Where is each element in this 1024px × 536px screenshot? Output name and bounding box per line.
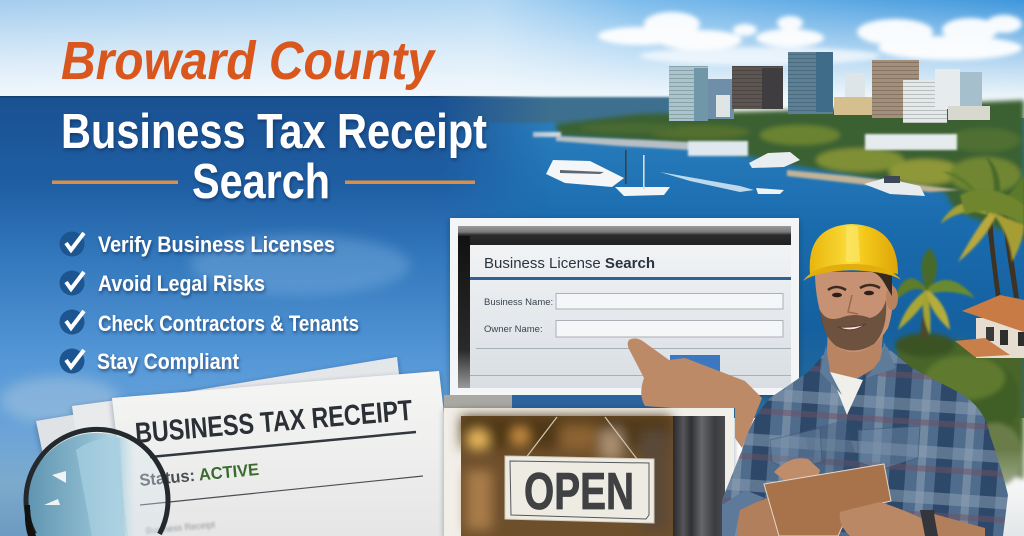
large palm tree bbox=[940, 155, 1024, 298]
far shoreline bbox=[430, 97, 670, 123]
shirt pockets bbox=[770, 426, 920, 470]
sign text: OPEN bbox=[524, 463, 634, 521]
yachts and boats bbox=[546, 150, 925, 196]
gradient band bbox=[0, 97, 550, 536]
orange rule right bbox=[345, 180, 475, 184]
heading rule bbox=[470, 277, 791, 280]
label: owner name: Owner Name: bbox=[484, 324, 543, 335]
marina bbox=[533, 132, 960, 192]
heading: Business Tax Receipt Search: Search bbox=[192, 155, 330, 209]
gap strip between panels bbox=[512, 395, 752, 408]
eyes and brows bbox=[828, 285, 880, 290]
foliage bbox=[895, 333, 1024, 487]
coastal city photo background bbox=[0, 0, 1024, 418]
palm tree bbox=[892, 248, 975, 338]
dark door frame bbox=[673, 416, 725, 536]
receipt heading: BUSINESS TAX RECEIPT bbox=[134, 395, 414, 450]
monitor top bezel bbox=[458, 226, 791, 246]
clipboard bbox=[764, 464, 891, 536]
watch bbox=[920, 510, 938, 536]
status rule bbox=[140, 476, 423, 505]
right house and foliage bbox=[892, 248, 1024, 536]
title: Broward County: Broward County bbox=[61, 31, 437, 91]
shoreline trees bbox=[555, 100, 1024, 240]
water bbox=[430, 118, 1024, 418]
construction worker bbox=[722, 224, 1008, 536]
collar bbox=[820, 342, 896, 395]
left blue band bbox=[0, 96, 550, 536]
receipt documents bbox=[36, 357, 458, 536]
checklist bbox=[60, 232, 359, 374]
pointing hand bbox=[628, 338, 762, 448]
screen bbox=[470, 245, 791, 388]
left forearm bbox=[735, 495, 790, 536]
hair bbox=[872, 272, 892, 296]
shirt bbox=[722, 345, 1008, 536]
skyline buildings bbox=[669, 52, 990, 123]
left sleeve cuff bbox=[722, 490, 765, 536]
heading: Business Tax Receipt Search bbox=[61, 105, 487, 209]
divider lines bbox=[470, 348, 791, 376]
frame bbox=[444, 408, 734, 536]
open sign storefront bbox=[444, 408, 734, 536]
sky bbox=[0, 0, 1024, 110]
hanging cord bbox=[525, 417, 637, 459]
band top edge bbox=[0, 96, 540, 98]
hard hat bbox=[803, 224, 901, 281]
monitor left bezel bbox=[458, 236, 470, 388]
pale fade at bottom bbox=[960, 450, 1024, 536]
input: owner name bbox=[556, 320, 783, 337]
sign board bbox=[505, 456, 654, 523]
front sheet bbox=[112, 371, 458, 536]
status line: Status: ACTIVE bbox=[139, 460, 260, 490]
magnifying glass bbox=[25, 429, 168, 536]
input: business name bbox=[556, 294, 783, 309]
item: Check Contractors & Tenants: Check Contractors & Tenants bbox=[98, 311, 359, 336]
white t-shirt bbox=[830, 372, 863, 415]
right hand bbox=[840, 502, 925, 536]
orange rule left bbox=[52, 180, 178, 184]
item: Stay Compliant: Stay Compliant bbox=[97, 349, 240, 374]
clouds bbox=[598, 12, 1022, 65]
blurred shop interior bbox=[461, 416, 673, 536]
mouth bbox=[838, 324, 866, 330]
neck bbox=[826, 325, 884, 385]
search screen panel bbox=[450, 218, 799, 395]
mottled light patches bbox=[190, 235, 410, 295]
nose bbox=[848, 295, 858, 314]
pen hand bbox=[774, 458, 820, 482]
search button bbox=[670, 355, 720, 373]
face bbox=[815, 272, 893, 352]
ear bbox=[886, 286, 898, 310]
label: business name: Business Name: bbox=[484, 297, 553, 308]
shirt shading bbox=[805, 420, 880, 536]
item: Avoid Legal Risks: Avoid Legal Risks bbox=[98, 271, 265, 296]
house bbox=[955, 295, 1024, 358]
beard bbox=[820, 300, 886, 351]
blurred small print: Business Receipt bbox=[145, 520, 216, 536]
receipt heading rule bbox=[150, 432, 416, 457]
frame bbox=[450, 218, 799, 395]
item: Verify Business Licenses: Verify Business Licenses bbox=[98, 232, 335, 257]
back sheets bbox=[36, 357, 402, 536]
right forearm bbox=[934, 514, 985, 536]
screen heading: Business License Search bbox=[484, 255, 655, 272]
heading: Business Tax Receipt Search: Business Tax Receipt bbox=[61, 105, 487, 159]
